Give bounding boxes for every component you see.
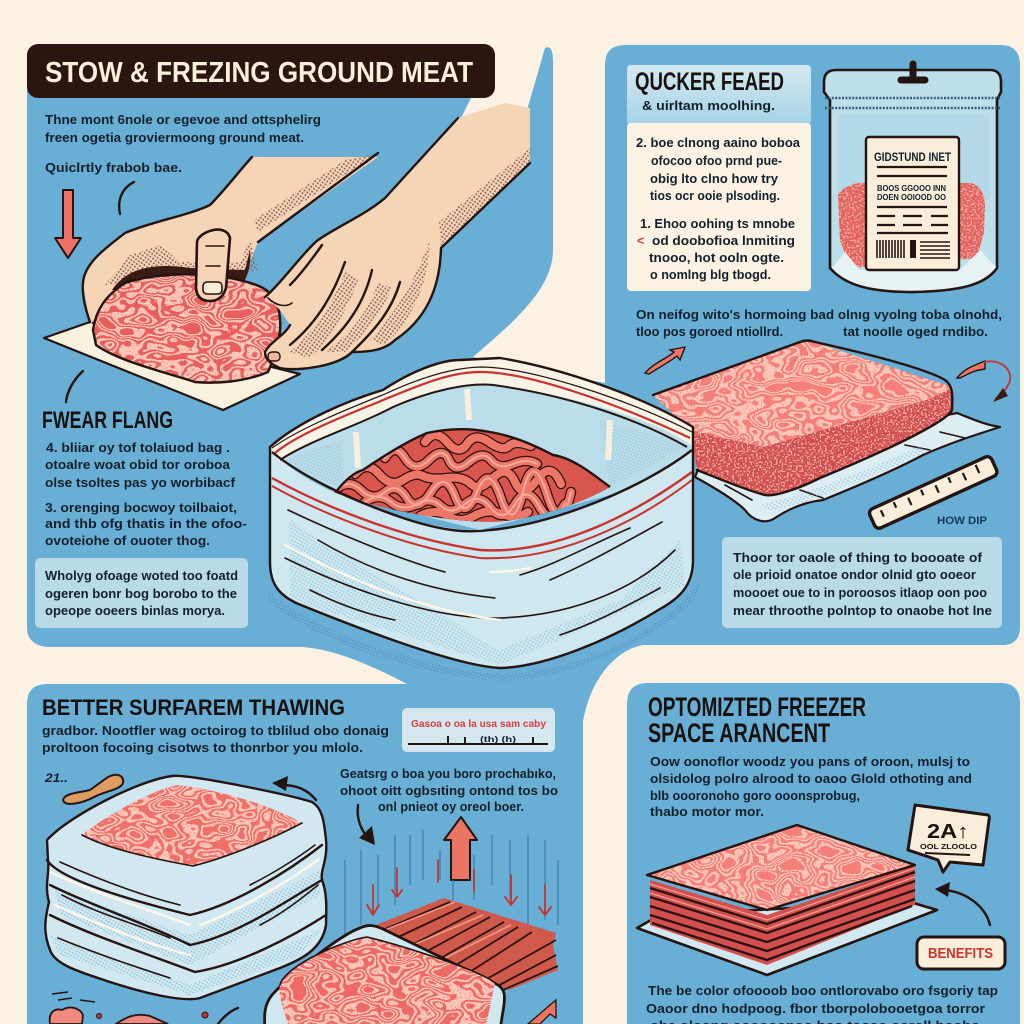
text: freezer footer — [646, 984, 998, 1024]
clear plastic tray — [265, 926, 504, 1024]
callout: light note right: moooet oue to in poroosos itlaop oon poo — [733, 586, 987, 600]
callout: light note right: Thoor tor oaole of thing to boooate of — [733, 551, 983, 565]
label: step number: 21.. — [44, 773, 68, 785]
layered sides — [650, 865, 915, 965]
chart: small timeline label box: Gasoa o oa la usa sam caby — [411, 719, 546, 730]
text: thawing detail: onl pnieot oy oreol boer. — [378, 800, 524, 814]
chart: small timeline label box: (th) (h) — [480, 735, 516, 744]
text: thawing intro: proltoon focoing cisotws to thonrbor you mlolo. — [42, 741, 363, 755]
small curved mark lower — [66, 371, 83, 402]
heading: better surface thawing: BETTER SURFAREM THAWING — [42, 695, 345, 720]
intro text — [45, 113, 321, 175]
callout: light note left: opeope ooeers binlas morya. — [45, 604, 225, 618]
text: pouch caption — [636, 308, 1002, 339]
striped back layers — [371, 898, 558, 990]
top meat face — [82, 785, 302, 866]
arrow: small orange up — [645, 347, 685, 374]
text: thawing detail: Geatsrg o boa you boro prochabıko, — [340, 767, 556, 781]
badge: benefits — [917, 937, 1005, 969]
slab top face — [653, 340, 953, 447]
text: pouch caption: On neifog wito's hormoing bad olnıg vyolng toba olnohd, — [636, 308, 1002, 322]
cold air lines with red arrows — [345, 830, 558, 940]
panel: cream steps box: o nomlng blg tbogd. — [650, 268, 771, 282]
text: pouch caption: tloo pos goroed ntiollrd. — [636, 325, 783, 339]
callout: price tag: 2A↑ — [927, 821, 969, 843]
pouch seal — [825, 98, 1000, 108]
callout: price tag — [908, 805, 989, 872]
pouch label: DOEN OOIOOD OO — [877, 193, 946, 202]
slab side — [690, 387, 953, 495]
thumb — [196, 230, 230, 301]
pouch label: GIDSTUND INET — [874, 152, 951, 164]
text block: steps: and thb ofg thatis in the ofoo- — [45, 517, 247, 531]
intro text: Quiclrtly frabob bae. — [45, 161, 182, 175]
illustration: labelled freezer pouch — [824, 64, 1001, 292]
pouch body — [824, 70, 1001, 292]
front meat slab — [279, 937, 495, 1024]
meat scraps — [50, 992, 238, 1024]
small curved mark — [119, 182, 134, 214]
illustration: ruler — [868, 455, 999, 530]
illustration: central open freezer bag with ground meat — [268, 358, 700, 681]
text: thawing detail: ohoot oitt ogbsıting ontond tos bo — [340, 784, 558, 798]
panel: cream steps box: od doobofioa lnmiting — [652, 234, 795, 248]
stack body — [45, 776, 326, 999]
text: freezer intro: olsidolog polro alrood to oaoo Glold othoting and — [650, 772, 972, 786]
illustration: flat slab of meat on plastic — [653, 340, 1000, 521]
bag front — [270, 447, 693, 668]
bag rim top — [270, 358, 693, 462]
panel: quicker heading box — [627, 65, 811, 125]
arrow: red down — [55, 190, 81, 258]
panel: quicker heading box: & uirltam moolhing. — [642, 99, 775, 113]
panel: optimized freezer space background — [627, 683, 1020, 1024]
illustration: stack of flat meat sheets — [637, 825, 937, 975]
text: freezer footer: Oaoor dno hodpoog. fbor tborpolobooetgoa torror — [646, 1002, 985, 1016]
text: freezer footer: The be color ofoooob boo ontlorovabo oro fsgoriy tap — [648, 984, 998, 998]
text: freezer intro — [650, 755, 972, 819]
text block: steps: olse tsoltes pas yo worbibacf — [45, 476, 236, 490]
text: thawing detail — [340, 767, 558, 814]
callout: light note left: ogeren bonr bog borobo to the — [45, 587, 237, 601]
panel: quicker heading box: QUCKER FEAED — [635, 68, 784, 96]
panel: cream steps box: tios ocr ooie plsoding. — [650, 189, 780, 203]
callout: light note left: Wholyg ofoage woted too foatd — [45, 569, 238, 583]
text block: steps — [45, 441, 247, 548]
text block: steps: 3. orenging bocwoy toilbaiot, — [45, 501, 237, 515]
arrow: curved red right — [957, 361, 1010, 402]
illustration: hands shaping meat on paper — [44, 103, 530, 410]
intro text: Thne mont 6nole or egevoe and ottsphelirg — [45, 113, 321, 127]
panel: cream steps box: < — [637, 234, 644, 248]
ground meat patty — [93, 274, 280, 383]
text: freezer intro: blb oooronoho goro ooonsprobug, — [650, 789, 860, 803]
tray sheet — [637, 902, 937, 975]
bag wrinkles — [285, 510, 675, 635]
panel: cream steps box: obig lto clno how try — [650, 172, 778, 186]
bag outline — [270, 358, 693, 668]
text: freezer intro: thabo motor mor. — [650, 805, 764, 819]
chart: small timeline label box — [402, 708, 555, 752]
heading: optimized freezer space: SPACE ARANCENT — [648, 718, 830, 748]
left hand — [83, 153, 378, 325]
pouch label: BOOS GGOOO INN — [877, 184, 946, 193]
title banner — [27, 44, 495, 98]
arrow: curved dark to stack — [935, 882, 990, 925]
icon: spatula — [63, 775, 123, 804]
bag interior — [270, 358, 693, 530]
text block: steps: otoalre woat obid tor oroboa — [45, 458, 231, 472]
panel: cream steps box: tnooo, hot ooln ogte. — [649, 251, 784, 265]
arrow: large salmon up — [444, 817, 477, 880]
hang hole — [901, 64, 925, 80]
parchment sheet — [44, 322, 300, 410]
label: how dip: HOW DIP — [937, 515, 987, 527]
illustration: stacked slabs with meat — [265, 898, 558, 1024]
text: thawing intro: gradbor. Nootfler wag octoirog to tblilud obo donaig — [42, 724, 389, 738]
text: pouch caption: tat nooIle oged rndibo. — [843, 325, 988, 339]
heading: optimized freezer space: OPTOMIZTED FREEZER — [648, 692, 866, 722]
right hand — [265, 103, 530, 369]
arrow: curved dark left — [272, 776, 316, 800]
callout: light note right — [722, 537, 1002, 628]
callout: light note right: mear throothe polntop to onaobe hot lne — [733, 604, 992, 618]
heading: fwear flang: FWEAR FLANG — [42, 407, 173, 434]
panel: cream steps box: 1. Ehoo oohing ts mnobe — [640, 217, 795, 231]
badge: benefits: BENEFITS — [928, 945, 993, 962]
bag shadow — [268, 580, 700, 681]
meat mass — [335, 429, 610, 522]
text: freezer intro: Oow oonoflor woodz you pans of oroon, mulsj to — [650, 755, 970, 769]
bag front rim and red stripes — [272, 472, 692, 550]
plastic sheet — [695, 413, 1000, 521]
callout: price tag: OOL ZLOOLO — [920, 842, 977, 851]
illustration: stacked frozen bags — [45, 776, 326, 999]
title banner: STOW & FREZING GROUND MEAT — [45, 57, 473, 89]
arrow: curved dark down — [358, 805, 375, 845]
top face — [647, 825, 915, 910]
text block: steps: ovoteiohe of ouoter thog. — [45, 534, 210, 548]
callout: light note right: ole prioid onatoe ondor olnid gto ooeor — [733, 568, 976, 582]
pouch label — [866, 137, 959, 270]
meat in pouch — [838, 183, 985, 268]
panel: cream steps box — [627, 123, 811, 291]
intro text: freen ogetia groviermoong ground meat. — [45, 131, 304, 145]
text: thawing intro — [42, 724, 389, 755]
panel: cream steps box: ofocoo ofoo prnd pue- — [651, 154, 782, 168]
text block: steps: 4. bliiar oy tof tolaiuod bag . — [46, 441, 230, 455]
panel: cream steps box: 2. boe clnong aaino boboa — [636, 136, 801, 150]
heading: optimized freezer space — [648, 692, 866, 748]
arrow: small orange bottom — [528, 1000, 556, 1024]
callout: light note left — [35, 558, 248, 628]
